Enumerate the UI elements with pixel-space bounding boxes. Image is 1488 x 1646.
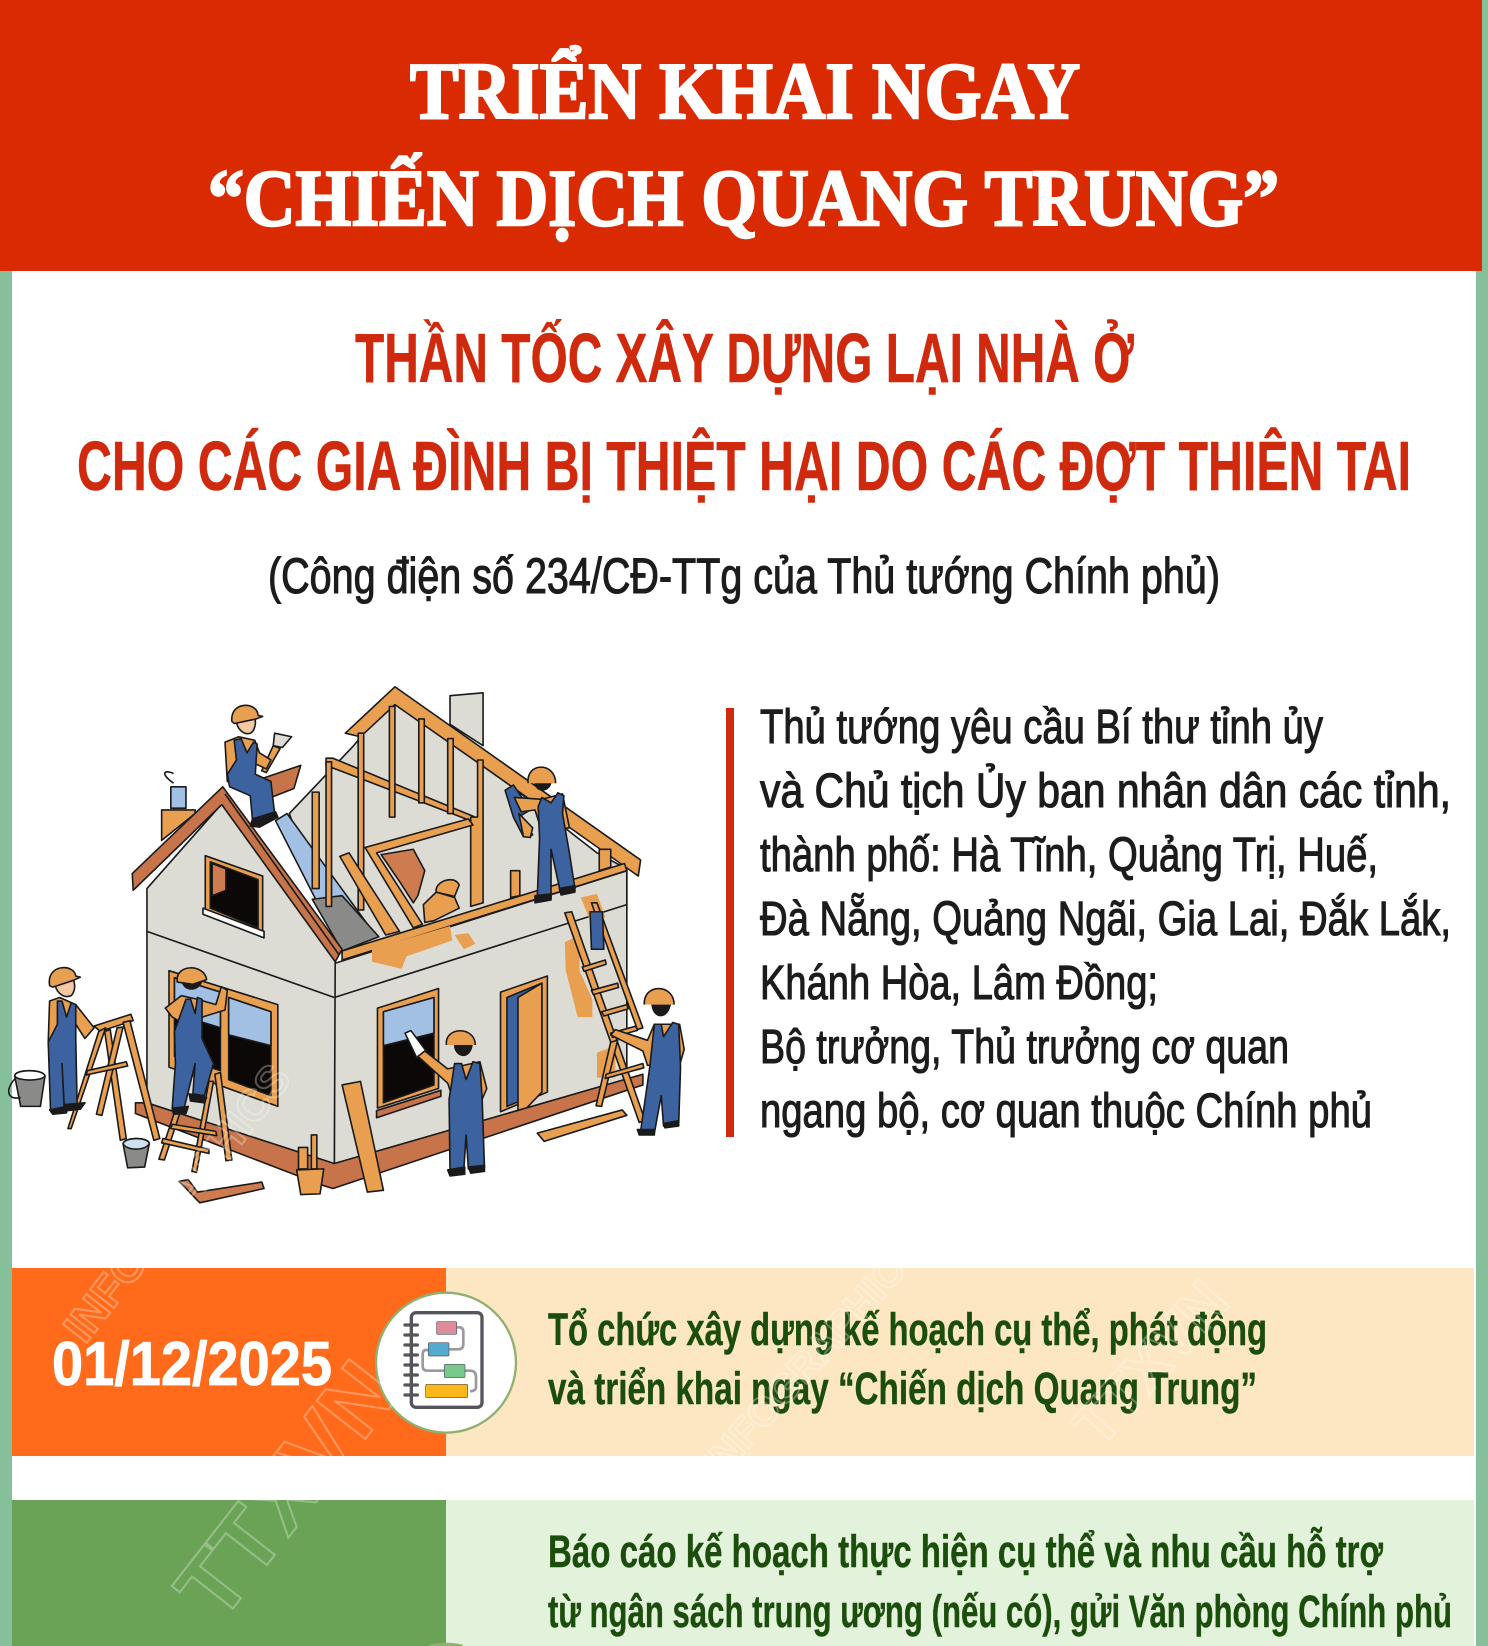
right wall [334, 871, 627, 1171]
stepladder under window [159, 1072, 232, 1172]
plinth [135, 1074, 643, 1189]
buckets [15, 1071, 45, 1106]
stepladder left [68, 1014, 160, 1140]
header banner [0, 0, 1482, 271]
requirement text block: Thủ tướng yêu cầu Bí thư tỉnh ủy [760, 701, 1323, 754]
chimney back [450, 693, 483, 746]
message background [446, 1500, 1474, 1646]
watermarks [54, 1055, 1241, 1637]
panel: 01/12/2025 milestone [12, 1268, 1474, 1456]
icon: planning notebook [376, 1293, 516, 1433]
red accent bar [726, 708, 734, 1137]
exposed brick patch [381, 849, 425, 903]
hanging overalls on ladder [590, 912, 604, 949]
date block [12, 1268, 446, 1456]
milestone text: và triển khai ngay “Chiến dịch Quang Trung” [548, 1363, 1257, 1414]
leaning planks [342, 1081, 383, 1192]
left roof rake [132, 787, 342, 962]
watermarks: TTXVN [157, 1343, 417, 1637]
worker painting front window [405, 1031, 487, 1176]
wall plate [342, 864, 627, 960]
roof framing [312, 687, 641, 935]
worker sitting on roof [225, 705, 301, 827]
front window [377, 989, 439, 1108]
worker on back roof [505, 767, 575, 903]
ladder right [565, 903, 645, 1122]
pot of sticks [298, 1135, 317, 1169]
title line 1: TRIỂN KHAI NGAY [410, 46, 1080, 136]
date block [12, 1500, 446, 1646]
left small chimney and jar [162, 810, 195, 840]
subtitle heading: THẦN TỐC XÂY DỰNG LẠI NHÀ Ở [355, 318, 1134, 397]
title line 2: “CHIẾN DỊCH QUANG TRUNG” [208, 153, 1279, 243]
source note: (Công điện số 234/CĐ-TTg của Thủ tướng Chính phủ) [268, 548, 1220, 604]
requirement text block: Bộ trưởng, Thủ trưởng cơ quan [760, 1021, 1289, 1074]
watermarks: INFOGRAPHICS [54, 1055, 301, 1351]
worker holding ladder [611, 989, 684, 1135]
illustration: workers rebuilding a house [9, 687, 684, 1203]
milestone text [548, 1304, 1267, 1414]
door [501, 976, 547, 1112]
subtitle heading [77, 318, 1411, 505]
date: 01/12/2025 [52, 1330, 332, 1399]
attic window [205, 856, 263, 935]
plaster patches [372, 926, 452, 969]
worker behind frame [423, 880, 459, 922]
damaged blue roof [276, 814, 377, 951]
message background [446, 1268, 1474, 1456]
watermarks: INFOGRAPHICS [694, 1229, 932, 1486]
lower left windows [169, 971, 278, 1106]
watermarks: TTXVN [1060, 1268, 1241, 1459]
left wall [147, 803, 335, 1171]
panel: reporting milestone [12, 1500, 1474, 1646]
worker on stepladder at window [165, 968, 227, 1114]
worker at stepladder left [48, 968, 94, 1114]
requirement text block [760, 701, 1451, 1138]
back gable wall [289, 696, 627, 953]
requirement text block: Khánh Hòa, Lâm Đồng; [760, 957, 1158, 1010]
milestone text [548, 1526, 1452, 1637]
icon circle top [429, 1644, 463, 1646]
